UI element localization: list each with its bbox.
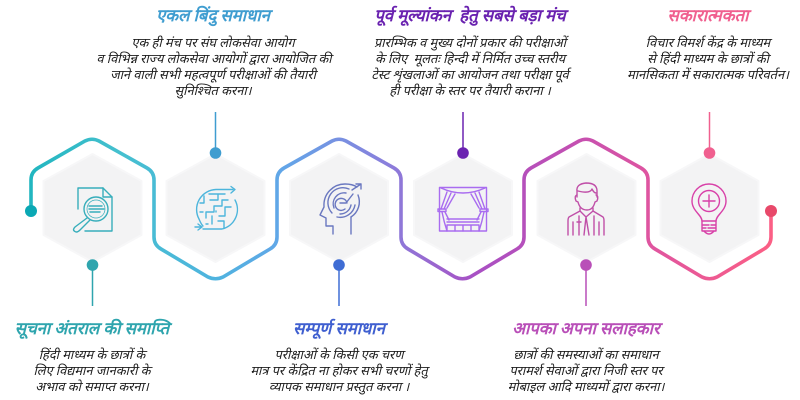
title: आपका अपना सलाहकार [512,319,664,338]
icon: maze circle [195,186,237,230]
title: सकारात्मकता [668,6,752,25]
description: जाने वाली सभी महत्वपूर्ण परीक्षाओं की तैयारी [110,67,319,83]
icon: person in suit [568,183,604,235]
connector: step 2 [210,112,221,159]
description: मानसिकता में सकारात्मक परिवर्तन। [627,67,790,82]
connector: step 3 [333,259,345,306]
title: एकल बिंदु समाधान [156,5,274,27]
title: पूर्व मूल्यांकन हेतु सबसे बड़ा मंच [374,5,569,27]
grey hexagon backgrounds [44,154,758,262]
text: step 5 [508,319,666,394]
description: ही परीक्षा के स्तर पर तैयारी कराना । [389,83,552,98]
connector: step 6 [704,112,715,159]
title: सम्पूर्ण समाधान [293,318,389,340]
description: विचार विमर्श केंद्र के माध्यम [646,35,773,50]
text: step 6 [627,6,790,82]
connector: step 5 [580,259,592,306]
connector: step 4 [457,112,469,159]
description: हिंदी माध्यम के छात्रों के [39,347,148,362]
start dot [25,205,37,217]
description: परीक्षाओं के किसी एक चरण [274,347,406,362]
text: step 3 [250,318,430,395]
description: छात्रों की समस्याओं का समाधान [513,347,662,362]
text: step 2 [96,5,334,99]
description: व्यापक समाधान प्रस्तुत करना । [269,380,410,395]
description: प्रारम्भिक व मुख्य दोनों प्रकार की परीक्षाओं [374,35,569,51]
icon: light bulb with plus [692,184,726,234]
title: सूचना अंतराल की समाप्ति [15,318,173,340]
description: से हिंदी माध्यम के छात्रों की [647,51,772,66]
description: अभाव को समाप्त करना। [35,379,150,394]
description: सुनिश्चित करना। [174,83,253,99]
description: व विभिन्न राज्य लोकसेवा आयोगों द्वारा आयोजित की [96,51,334,66]
description: परामर्श सेवाओं द्वारा निजी स्तर पर [509,363,665,378]
description: मोबाइल आदि माध्यमों द्वारा करना। [508,379,666,394]
text: step 4 [371,5,572,98]
connector: step 1 [87,259,98,306]
description: के लिए मूलतः हिन्दी में निर्मित उच्च स्तरीय [375,51,568,67]
end dot [765,205,777,217]
description: लिए विद्यमान जानकारी के [33,363,154,378]
icon: theatre stage [438,188,488,231]
gradient hexagonal connector line [31,139,771,279]
text: step 1 [15,318,173,394]
icon: document with magnifier [74,188,112,232]
description: टेस्ट शृंखलाओं का आयोजन तथा परीक्षा पूर्व [371,67,572,83]
description: एक ही मंच पर संघ लोकसेवा आयोग [131,35,297,50]
description: मात्र पर केंद्रित ना होकर सभी चरणों हेतु [250,363,430,379]
icon: head with maze [320,184,361,234]
